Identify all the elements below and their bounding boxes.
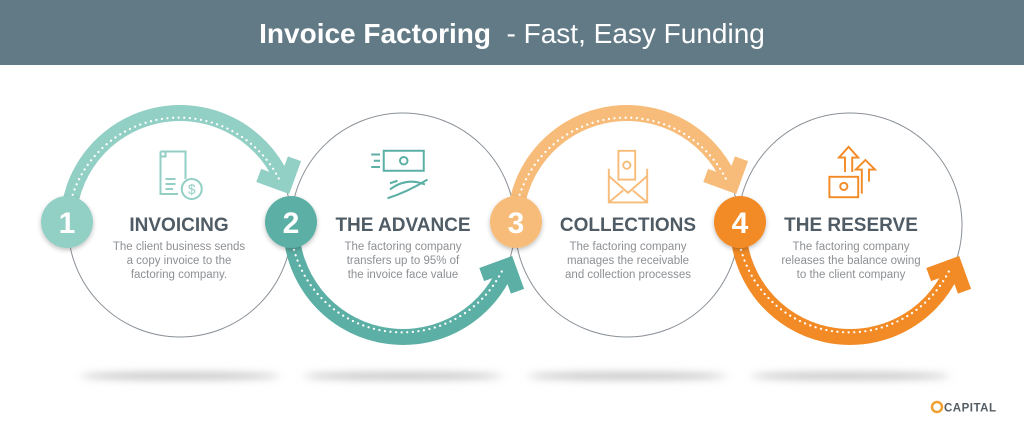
text block 4: THE RESERVE	[784, 215, 918, 236]
text block 4: to the client company	[797, 269, 906, 281]
text block 4: releases the balance owing	[781, 255, 921, 267]
text block 2: THE ADVANCE	[335, 215, 471, 236]
circle outlines	[68, 113, 962, 337]
text block 1: The client business sends	[113, 241, 245, 253]
text block 4	[781, 215, 921, 281]
badge 1	[41, 196, 93, 248]
text block 2: transfers up to 95% of	[347, 255, 460, 267]
arrow 2	[291, 225, 518, 337]
icon: cash with rising arrows	[829, 147, 875, 197]
text block 2	[335, 215, 471, 281]
arrow 4	[738, 225, 964, 337]
icon: cash in hand	[371, 151, 428, 198]
icon: envelope with cash	[609, 151, 647, 202]
badge 2	[265, 196, 317, 248]
badge 4: 4	[732, 207, 749, 240]
badge 4	[714, 196, 766, 248]
arrow 1	[68, 113, 294, 225]
text block 2: the invoice face value	[348, 269, 458, 281]
title: Invoice Factoring - Fast, Easy Funding	[259, 18, 765, 49]
text block 3: COLLECTIONS	[560, 215, 696, 236]
text block 3: manages the receivable	[567, 255, 689, 267]
text block 1: factoring company.	[131, 269, 227, 281]
text block 1: INVOICING	[129, 215, 229, 236]
text block 1	[113, 215, 245, 281]
text block 4: The factoring company	[793, 241, 910, 253]
arrow 3	[515, 113, 742, 225]
badge 1: 1	[59, 207, 75, 240]
icon: invoice with dollar: $	[188, 182, 196, 197]
text block 3: and collection processes	[565, 269, 691, 281]
header bar	[0, 0, 1024, 65]
badge 2: 2	[283, 207, 299, 240]
icon: invoice with dollar	[160, 152, 202, 199]
text block 3	[560, 215, 696, 281]
badge 3: 3	[508, 207, 524, 240]
text block 1: a copy invoice to the	[127, 255, 231, 267]
badge 3	[490, 196, 542, 248]
logo: CAPITAL	[944, 402, 996, 414]
floor shadows	[80, 372, 950, 380]
text block 3: The factoring company	[570, 241, 687, 253]
text block 2: The factoring company	[345, 241, 462, 253]
